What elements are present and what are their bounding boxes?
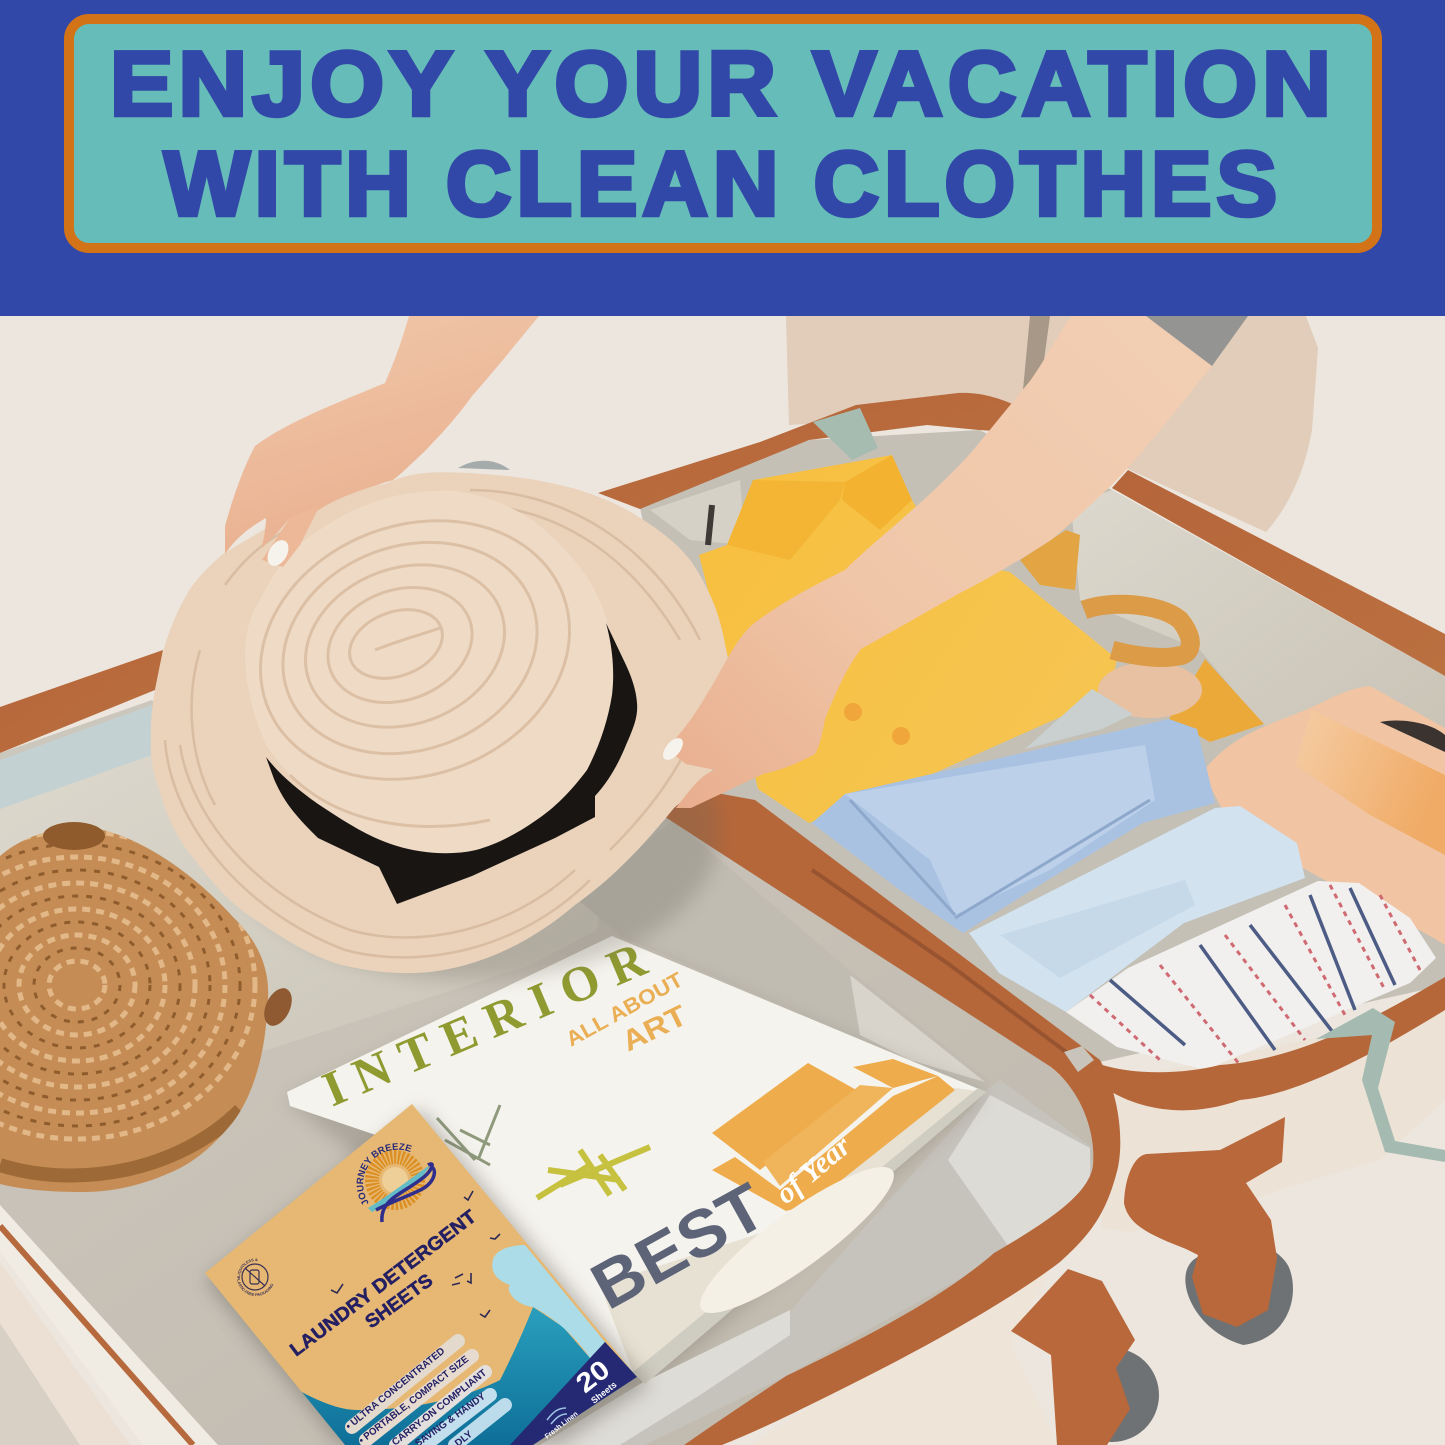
side strap xyxy=(1316,1008,1445,1162)
blue jeans roll xyxy=(812,719,1215,933)
shirt buttons xyxy=(844,703,862,721)
darker carpet lower left xyxy=(0,1323,80,1445)
magazine spine edge xyxy=(633,1088,986,1384)
brim xyxy=(151,472,737,973)
right arm and hand xyxy=(659,316,1248,808)
shirt collar xyxy=(727,480,845,560)
sheet count: Fresh Linen xyxy=(544,1411,580,1441)
sofa xyxy=(712,1059,955,1211)
silver light panel xyxy=(948,1095,1090,1250)
left arm and hand xyxy=(225,316,539,570)
left rim xyxy=(0,650,163,753)
rim highlight and zipper xyxy=(812,870,1070,1055)
brim weave xyxy=(165,490,700,957)
plastic-free badge: PLASTIC-FREE PACKAGING xyxy=(237,1277,274,1296)
book under magazine xyxy=(540,1310,790,1445)
blue zipper band xyxy=(0,705,152,809)
lower shell xyxy=(752,1232,1096,1445)
yellow shirt xyxy=(699,455,1117,823)
wave xyxy=(298,1307,640,1445)
sun rays xyxy=(372,1157,418,1203)
jeans pocket flap xyxy=(845,745,1155,915)
sandal xyxy=(1084,604,1264,742)
magazine lower right sand xyxy=(600,1088,986,1384)
magazine xyxy=(287,930,986,1445)
all about art: ART xyxy=(617,1000,692,1058)
grey sleeve xyxy=(1146,316,1248,366)
grey handle behind hat xyxy=(458,461,510,470)
package face xyxy=(200,1100,650,1445)
lower floor xyxy=(0,700,1094,1445)
crown xyxy=(245,491,615,853)
package shadow xyxy=(205,1108,650,1445)
package benefits: • ULTRA CONCENTRATED xyxy=(344,1346,447,1432)
lower wheels xyxy=(1011,1269,1159,1445)
product package xyxy=(203,1104,653,1445)
birds xyxy=(331,1191,500,1317)
magazine pages xyxy=(287,936,986,1384)
title xyxy=(110,34,1336,235)
bag clasp xyxy=(43,822,105,850)
zip puller xyxy=(1064,1046,1094,1072)
side loop xyxy=(259,984,297,1030)
light jeans roll xyxy=(969,806,1305,1012)
rattan weave rings xyxy=(0,831,255,1139)
crown weave rings xyxy=(224,478,606,826)
striped shirt roll xyxy=(1066,881,1436,1070)
best of year: BEST xyxy=(579,1168,777,1323)
benefit pills xyxy=(352,1341,505,1445)
silver side lining xyxy=(560,1080,1096,1445)
right rim xyxy=(1112,470,1445,676)
plastic-free badge xyxy=(237,1258,274,1296)
black ribbon xyxy=(266,623,637,904)
title box xyxy=(69,19,1377,248)
upper lining xyxy=(640,430,1445,1062)
nail xyxy=(659,735,687,763)
magazine title: INTERIOR xyxy=(314,930,655,1117)
orange cloth behind shirt xyxy=(1020,530,1080,590)
peach sweater xyxy=(1203,686,1445,945)
silver lining folds xyxy=(650,480,745,545)
upper suitcase lid xyxy=(598,393,1445,1232)
upper wheels xyxy=(1124,1117,1293,1345)
magazine shadow xyxy=(287,945,985,1390)
upper shell xyxy=(1102,1010,1445,1232)
header banner xyxy=(0,0,1445,316)
bottom-left white edge and rim xyxy=(0,1205,218,1445)
title: WITH CLEAN CLOTHES xyxy=(164,134,1282,235)
nail xyxy=(263,536,293,570)
magazine: of Year xyxy=(769,1129,857,1210)
plastic-free badge: LIQUIDLESS & xyxy=(237,1258,258,1277)
top strap xyxy=(813,408,878,460)
grey garment xyxy=(1025,689,1133,749)
package title: SHEETS xyxy=(362,1270,437,1333)
plants xyxy=(437,1105,650,1198)
lower rim xyxy=(662,790,1120,1445)
package title: LAUNDRY DETERGENT xyxy=(286,1206,481,1361)
navy band xyxy=(510,1342,637,1445)
orange bottle xyxy=(1295,710,1445,855)
hat shadow xyxy=(220,680,720,980)
sheet count: 20 xyxy=(570,1354,615,1399)
right wall lining xyxy=(1071,490,1445,760)
photo: carpet background xyxy=(0,316,1445,1445)
package benefits: • PORTABLE, COMPACT SIZE xyxy=(357,1354,471,1445)
sheet count: Sheets xyxy=(589,1380,618,1406)
lower suitcase xyxy=(0,650,1120,1445)
all about art: ALL ABOUT xyxy=(562,968,687,1051)
person's knees xyxy=(786,316,1318,532)
sheet count xyxy=(544,1354,618,1441)
back wall xyxy=(0,750,600,1100)
thumb over brim xyxy=(262,505,320,567)
top rim xyxy=(598,393,1030,509)
upper front rim and zipper xyxy=(1096,977,1445,1110)
rattan bag xyxy=(0,822,297,1192)
brand logo xyxy=(356,1143,436,1222)
straw hat xyxy=(151,472,737,980)
dark sunglasses xyxy=(1380,721,1445,752)
foam xyxy=(492,1245,605,1358)
ribbed grey lining xyxy=(577,820,989,1092)
title: ENJOY YOUR VACATION xyxy=(110,34,1336,135)
brand logo: JOURNEY BREEZE xyxy=(356,1143,412,1205)
round rug xyxy=(685,1148,909,1332)
